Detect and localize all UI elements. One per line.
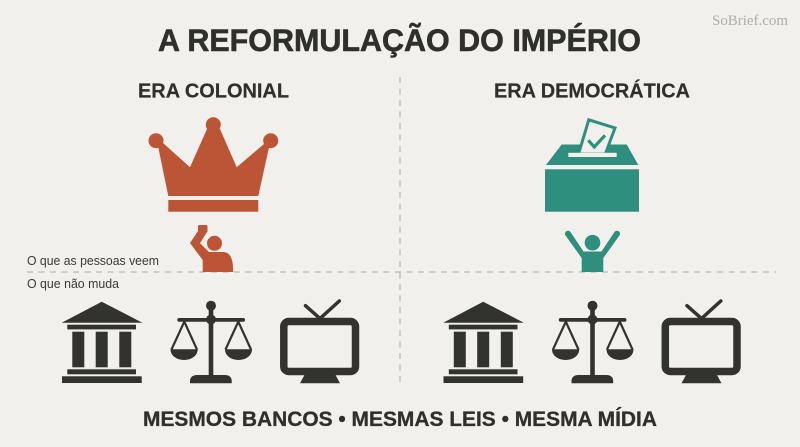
label: what people see: O que as pessoas veem	[27, 254, 159, 268]
icon: television left	[284, 301, 356, 383]
icon: bank right	[443, 302, 524, 383]
label: what does not change: O que não muda	[27, 277, 119, 291]
icon: scales right	[552, 301, 634, 383]
icon: scales left	[170, 301, 252, 383]
footer slogan: MESMOS BANCOS • MESMAS LEIS • MESMA MÍDIA	[143, 406, 657, 431]
heading: era democrática: ERA DEMOCRÁTICA	[494, 80, 690, 103]
icon: television right	[665, 301, 737, 383]
icon: bank left	[62, 302, 142, 383]
icon: person with raised fist	[190, 225, 233, 272]
icon: crown	[148, 117, 278, 212]
heading: era colonial: ERA COLONIAL	[138, 80, 289, 103]
icon: ballot box	[545, 120, 639, 212]
watermark: SoBrief.com	[712, 13, 788, 29]
title: A REFORMULAÇÃO DO IMPÉRIO	[158, 22, 641, 58]
icon: person with raised arms	[565, 231, 620, 272]
